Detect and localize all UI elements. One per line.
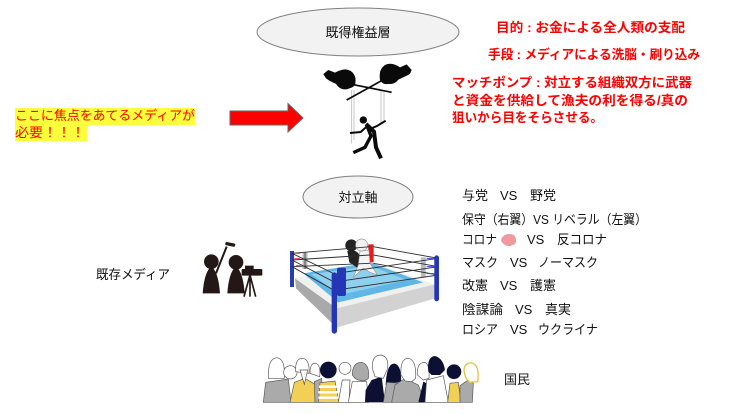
list: oppositions: 反コロナ — [557, 232, 607, 247]
icon: puppet and hands — [323, 64, 412, 158]
callout: media focus: 必要！！！ — [15, 125, 85, 140]
text: means: 手段 : メディアによる洗脳・刷り込み — [488, 47, 700, 62]
ring ropes — [292, 247, 438, 292]
list: oppositions: 護憲 — [530, 278, 556, 293]
list: oppositions: ロシア — [462, 322, 498, 337]
list: oppositions: 与党 — [462, 188, 488, 203]
ellipse: vested interests: 既得権益層 — [325, 25, 391, 40]
list: oppositions: 改憲 — [462, 278, 488, 293]
ellipse: vested interests — [257, 8, 459, 56]
text: purpose: 目的 : お金による全人類の支配 — [496, 20, 685, 35]
list: oppositions — [462, 188, 647, 337]
boxers — [345, 239, 377, 277]
list: oppositions: 野党 — [530, 188, 556, 203]
icon: brain — [501, 234, 516, 246]
list: oppositions: VS — [510, 255, 528, 270]
boxing ring — [292, 239, 438, 331]
list: oppositions: 保守（右翼）VS リベラル（左翼） — [462, 212, 647, 227]
list: oppositions: VS — [500, 278, 518, 293]
callout: media focus — [15, 108, 195, 141]
text: match pump: と資金を供給して漁夫の利を得る/真の — [452, 93, 688, 108]
list: oppositions: VS — [527, 232, 545, 247]
list: oppositions: VS — [500, 188, 518, 203]
ring platform — [295, 262, 435, 308]
arrow: red — [230, 104, 303, 132]
crowd of citizens — [263, 355, 478, 402]
ellipse: axis of conflict: 対立軸 — [338, 190, 378, 205]
list: oppositions: VS — [515, 302, 533, 317]
list: oppositions: 真実 — [545, 302, 571, 317]
list: oppositions: ノーマスク — [538, 255, 598, 270]
text: match pump: マッチポンプ : 対立する組織双方に武器 — [452, 75, 692, 90]
callout: media focus: ここに焦点をあてるメディアが — [15, 108, 195, 123]
list: oppositions: ウクライナ — [538, 322, 598, 337]
text: match pump — [452, 75, 692, 125]
list: oppositions: 陰謀論 — [462, 302, 503, 317]
list: oppositions: VS — [510, 322, 528, 337]
text: match pump: 狙いから目をそらさせる。 — [452, 110, 603, 125]
icon: media crew — [203, 242, 262, 297]
list: oppositions: マスク — [462, 255, 498, 270]
list: oppositions: コロナ — [462, 232, 497, 247]
ring posts — [305, 252, 423, 278]
label: existing media: 既存メディア — [96, 267, 170, 282]
label: citizens: 国民 — [504, 372, 530, 387]
ellipse: axis of conflict — [303, 176, 413, 218]
